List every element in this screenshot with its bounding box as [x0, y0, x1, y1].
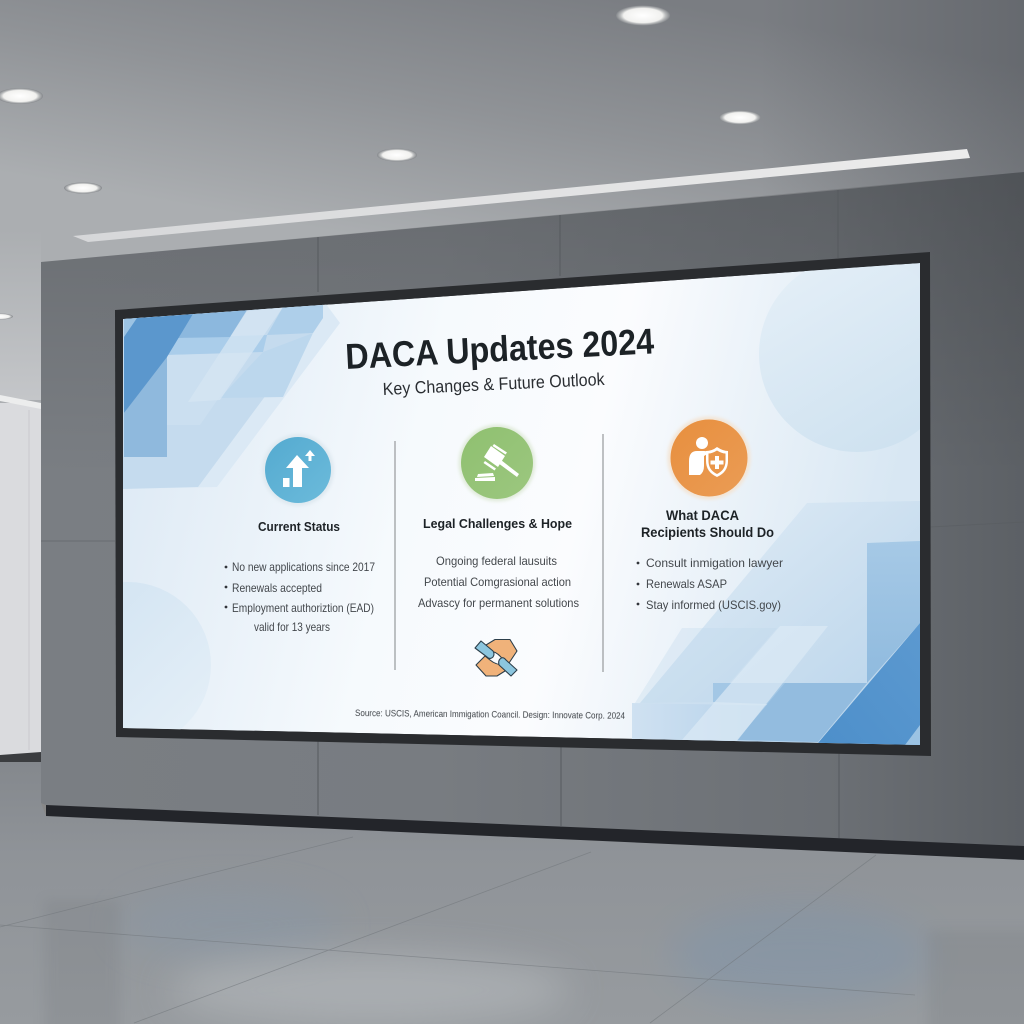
- top-right circle decoration: [759, 264, 920, 452]
- dark baseboard: [46, 805, 1024, 860]
- text list: legal challenges and hope: Ongoing federal lausuits: [436, 554, 557, 568]
- source credit: Source: USCIS, American Immigation Coancil. Design: Innovate Corp. 2024: [355, 708, 625, 722]
- ceiling: [0, 0, 1024, 410]
- bullet list: current status: valid for 13 years: [254, 620, 330, 634]
- column 2: legal challenges and hope: [418, 424, 579, 676]
- subtitle: Key Changes & Future Outlook: [382, 369, 605, 399]
- ceiling downlights: [0, 6, 761, 320]
- bullet list: what recipients should do: Consult inmigation lawyer: [646, 556, 783, 570]
- text list: legal challenges and hope: Advascy for permanent solutions: [418, 596, 579, 610]
- bottom-left circle decoration: [123, 582, 211, 730]
- display screen panel: [123, 263, 920, 745]
- icon: gavel in green circle: [458, 424, 536, 502]
- floor: [0, 762, 1024, 1024]
- display frame: [115, 252, 931, 756]
- title: DACA Updates 2024: [344, 320, 655, 377]
- heading: legal challenges and hope: Legal Challenges & Hope: [423, 516, 572, 531]
- top-left geometric decoration: [123, 300, 340, 489]
- bottom-right geometric decoration: [632, 501, 920, 745]
- bullet list: current status: No new applications since 2017: [232, 560, 375, 574]
- column 1: current status: [225, 434, 375, 634]
- bullet list: current status: Renewals accepted: [232, 581, 322, 595]
- column 3: what recipients should do: [637, 416, 783, 612]
- heading: current status: Current Status: [258, 519, 340, 534]
- left side corridor wall: [0, 395, 41, 765]
- icon: person with shield in orange circle: [668, 416, 750, 500]
- heading: what DACA recipients should do: [641, 507, 774, 540]
- icon: clasped hands: [475, 640, 517, 676]
- column dividers: [395, 434, 603, 672]
- ceiling light strip: [73, 149, 970, 242]
- heading: what DACA recipients should do: Recipients Should Do: [641, 524, 774, 540]
- bullet list: current status: [225, 560, 375, 634]
- heading: what DACA recipients should do: What DACA: [666, 507, 739, 523]
- feature wall: [41, 172, 1024, 848]
- text list: legal challenges and hope: Potential Comgrasional action: [424, 575, 571, 589]
- icon: rising arrow in blue circle: [262, 434, 334, 506]
- bullet list: current status: Employment authoriztion (EAD): [232, 601, 374, 615]
- title block: [344, 320, 655, 399]
- bullet list: what recipients should do: Renewals ASAP: [646, 577, 727, 591]
- text list: legal challenges and hope: [418, 554, 579, 610]
- bullet list: what recipients should do: [637, 556, 783, 612]
- bullet list: what recipients should do: Stay informed (USCIS.goy): [646, 598, 781, 612]
